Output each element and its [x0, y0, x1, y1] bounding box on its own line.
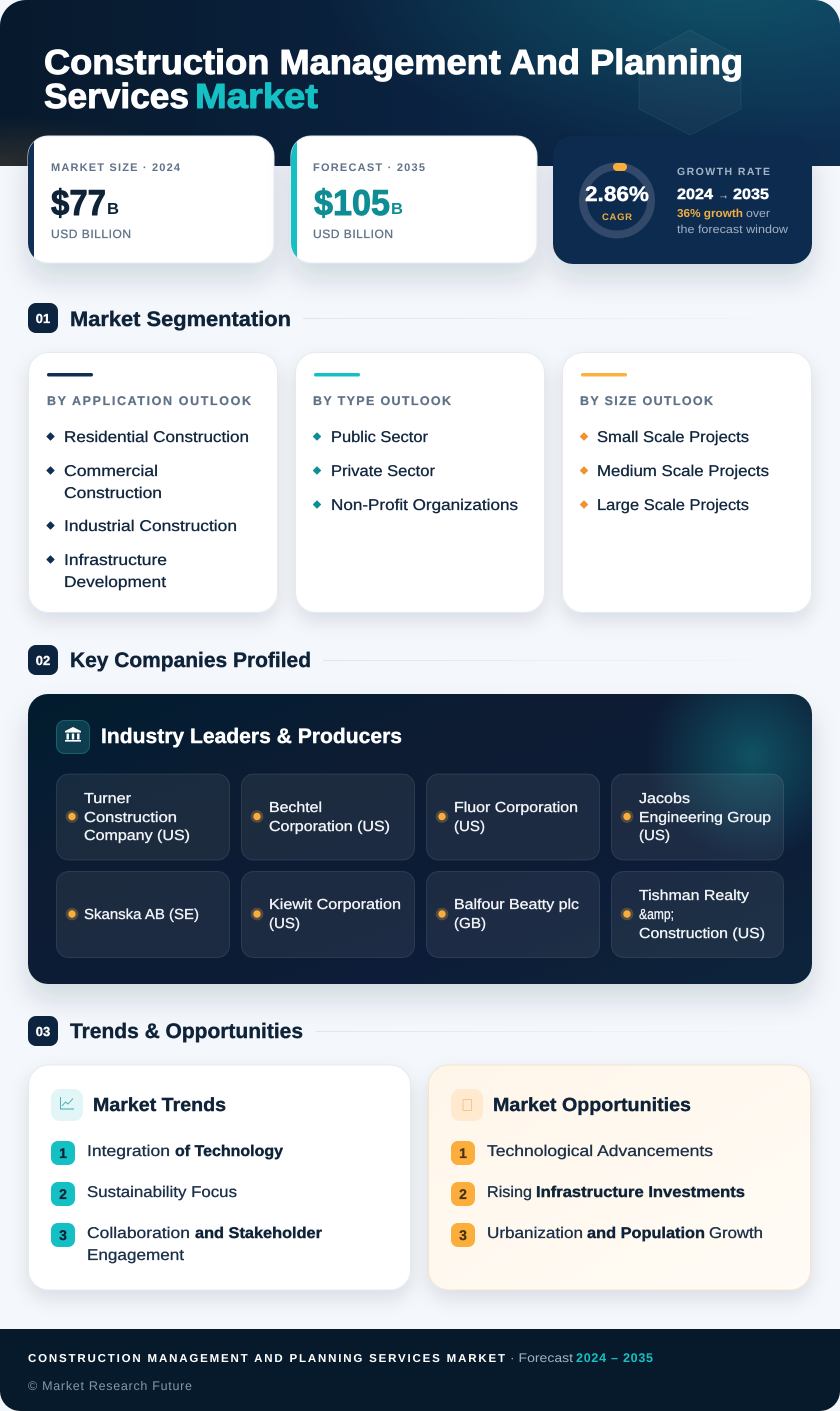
company: Turner: Construction — [84, 810, 177, 826]
company: Kiewit — [242, 872, 414, 958]
panel heading: Industry Leaders & Producers — [101, 725, 402, 748]
panel: by application outlook: BY APPLICATION OUTLOOK — [47, 394, 251, 408]
growth text: over — [746, 208, 770, 220]
trend 3: 3 — [59, 1227, 67, 1243]
heading: Market Opportunities — [493, 1095, 691, 1116]
section heading 02: 02 — [36, 653, 50, 668]
company: Bechtel: Bechtel — [269, 800, 322, 816]
icon: bank building — [56, 720, 90, 754]
panel: by application outlook: Commercial — [64, 463, 158, 480]
panel: by size outlook: BY SIZE OUTLOOK — [580, 394, 713, 408]
stat card: market size 2024: USD BILLION — [51, 227, 131, 241]
company: Jacobs — [612, 774, 784, 860]
company: Kiewit: Kiewit Corporation — [269, 897, 401, 913]
company: Balfour Beatty: (GB) — [454, 916, 486, 932]
section heading 01: Market Segmentation — [70, 308, 291, 331]
section heading 02: Key Companies Profiled — [70, 649, 311, 672]
opportunity 2: Infrastructure Investments — [536, 1184, 745, 1201]
opportunity 1 — [451, 1141, 713, 1165]
footer: · Forecast — [510, 1351, 574, 1365]
stat card: forecast 2035: USD BILLION — [313, 227, 393, 241]
stat card: market size 2024: $77 — [51, 182, 106, 223]
section heading 03: Trends & Opportunities — [70, 1020, 303, 1043]
trend 3: and Stakeholder — [195, 1225, 322, 1242]
panel: by application outlook: Infrastructure — [64, 552, 167, 569]
panel: by application outlook: Industrial Construction — [64, 518, 237, 535]
footer — [0, 1329, 840, 1411]
growth text: 2035 — [733, 186, 769, 203]
opportunity 2 — [451, 1182, 745, 1206]
CAGR ring: 2.86% — [585, 183, 649, 206]
company: Jacobs: Jacobs — [639, 791, 690, 807]
company: Fluor — [426, 774, 600, 860]
company: Fluor: (US) — [454, 819, 485, 835]
section heading 01: 01 — [36, 311, 50, 326]
company: Tishman Realty: Tishman Realty — [639, 888, 750, 904]
stat card: forecast 2035: $105 — [314, 182, 390, 223]
trend 3 — [51, 1223, 322, 1264]
panel: by size outlook — [562, 352, 812, 612]
trend 2: 2 — [59, 1186, 67, 1202]
trend 2: Sustainability Focus — [87, 1184, 237, 1201]
company: Skanska: Skanska AB (SE) — [84, 907, 199, 923]
panel: by application outlook — [28, 352, 278, 612]
growth text: 36% growth — [677, 208, 743, 220]
panel: by application outlook: Development — [64, 574, 167, 591]
panel: by type outlook: Private Sector — [331, 463, 435, 480]
company: Tishman Realty: Construction (US) — [639, 926, 765, 942]
panel: by type outlook: Non-Profit Organizations — [331, 497, 518, 514]
panel: market opportunities — [428, 1065, 810, 1290]
stat card: forecast 2035: B — [391, 201, 403, 218]
footer: © Market Research Future — [28, 1379, 192, 1393]
panel: by application outlook: Residential Construction — [64, 429, 249, 446]
icon: placeholder glyph — [451, 1089, 483, 1121]
growth text: 2024 — [677, 186, 714, 203]
heading: Market Trends — [93, 1095, 226, 1116]
trend 3: Engagement — [87, 1247, 185, 1264]
footer: 2024 – 2035 — [576, 1351, 653, 1365]
company: Bechtel — [242, 774, 414, 860]
CAGR ring: CAGR — [602, 212, 632, 223]
title: Services — [44, 77, 189, 116]
company: Turner: Company (US) — [84, 828, 190, 844]
opportunity 2: Rising — [487, 1184, 532, 1201]
trend 2 — [51, 1182, 237, 1206]
opportunity 1: Technological Advancements — [487, 1143, 713, 1160]
trend 1: Integration — [87, 1143, 170, 1160]
company: Bechtel: Corporation (US) — [269, 819, 390, 835]
title: Market — [195, 77, 318, 116]
opportunity 3: Growth — [709, 1225, 763, 1242]
growth text: GROWTH RATE — [677, 166, 770, 178]
section heading 03: 03 — [36, 1024, 50, 1039]
company: Turner — [56, 774, 230, 860]
panel: by type outlook — [296, 352, 544, 612]
opportunity 3: and Population — [587, 1225, 705, 1242]
opportunity 3: Urbanization — [487, 1225, 583, 1242]
panel: by size outlook: Medium Scale Projects — [597, 463, 769, 480]
stat card: growth rate — [553, 136, 812, 264]
trend 1 — [51, 1141, 283, 1165]
section heading 02 — [28, 645, 812, 675]
company: Balfour Beatty — [426, 872, 600, 958]
CAGR ring — [583, 163, 651, 234]
title — [44, 43, 743, 116]
opportunity 3 — [451, 1223, 763, 1247]
company: Kiewit: (US) — [269, 916, 300, 932]
footer: CONSTRUCTION MANAGEMENT AND PLANNING SERVICES MARKET — [28, 1353, 505, 1365]
company: Balfour Beatty: Balfour Beatty plc — [454, 897, 579, 913]
growth text: the forecast window — [677, 224, 789, 236]
company: Tishman Realty: &amp; — [639, 907, 674, 923]
opportunity 2: 2 — [459, 1186, 467, 1202]
company: Jacobs: (US) — [639, 828, 670, 844]
trend 3: Collaboration — [87, 1225, 190, 1242]
trend 1: 1 — [59, 1145, 67, 1161]
panel: key companies — [28, 694, 812, 984]
stat card: market size 2024 — [28, 136, 274, 263]
panel: by size outlook: Small Scale Projects — [597, 429, 749, 446]
opportunity 3: 3 — [459, 1227, 467, 1243]
company: Tishman Realty — [612, 872, 784, 958]
panel: by application outlook: Construction — [64, 485, 162, 502]
section heading 01 — [28, 303, 812, 333]
icon: line chart — [51, 1089, 83, 1121]
company: Fluor: Fluor Corporation — [454, 800, 578, 816]
stat card: market size 2024: B — [107, 201, 119, 218]
stat card: forecast 2035 — [291, 136, 537, 263]
trend 1: of Technology — [175, 1143, 283, 1160]
decorative hexagon — [639, 30, 741, 135]
stat card: forecast 2035: FORECAST · 2035 — [313, 162, 425, 174]
panel: by size outlook: Large Scale Projects — [597, 497, 749, 514]
opportunity 1: 1 — [459, 1145, 467, 1161]
company: Skanska — [56, 872, 230, 958]
section heading 03 — [28, 1016, 812, 1046]
panel: by type outlook: BY TYPE OUTLOOK — [313, 394, 451, 408]
header band — [0, 0, 840, 166]
panel: by type outlook: Public Sector — [331, 429, 428, 446]
company: Turner: Turner — [84, 791, 131, 807]
growth text: → — [718, 187, 729, 202]
title: Construction Management And Planning — [44, 43, 743, 82]
growth text — [677, 166, 789, 236]
stat card: market size 2024: MARKET SIZE · 2024 — [51, 162, 181, 174]
company: Jacobs: Engineering Group — [639, 810, 771, 826]
panel: market trends — [28, 1065, 410, 1290]
